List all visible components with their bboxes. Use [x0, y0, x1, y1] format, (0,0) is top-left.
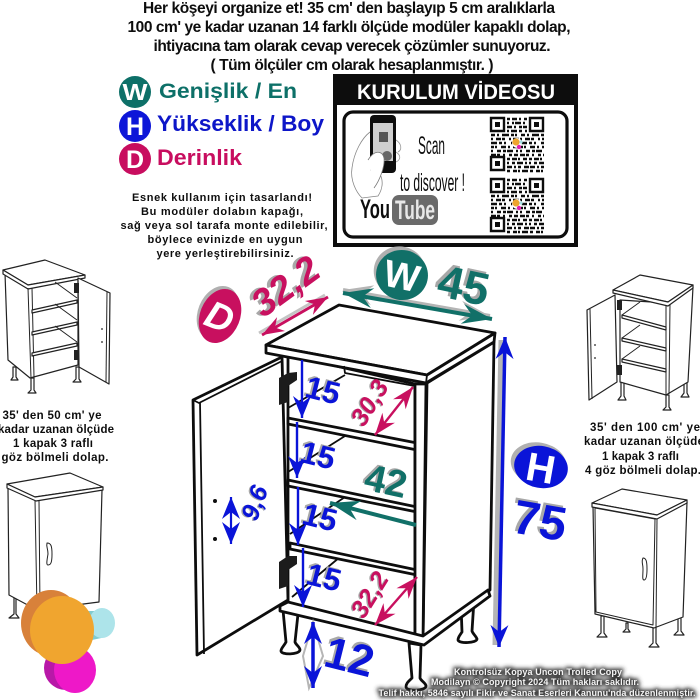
cabinet right side panel — [423, 342, 494, 640]
right cabinet caption: 4 göz bölmeli dolap. — [585, 465, 700, 477]
flexible use description text — [120, 192, 328, 260]
legend item: height: H — [126, 113, 144, 141]
orange cylinder — [21, 590, 94, 664]
legend item: width: Genişlik / En — [159, 80, 297, 103]
copyright notice: Kontrolsüz Kopya Uncon Trolled Copy — [454, 667, 622, 677]
bottom depth: 32,2: 32,2 — [345, 567, 395, 623]
legend: width, height, depth — [119, 76, 325, 175]
right cabinet caption: 1 kapak 3 raflı — [602, 451, 679, 463]
legend item: depth: D — [126, 146, 144, 174]
copyright notice: Modilayn © Copyright 2024 Tüm hakları saklıdır. — [431, 677, 639, 687]
width arrow — [343, 290, 492, 319]
left cabinet caption — [0, 410, 114, 464]
cabinet front posts — [415, 384, 426, 640]
flexible use description text: sağ veya sol tarafa monte edilebilir, — [120, 220, 328, 232]
height badge: H — [523, 445, 559, 493]
light blue cylinder — [88, 608, 115, 640]
intro heading text: 100 cm' ye kadar uzanan 14 farklı ölçüde modüler kapaklı dolap, — [128, 19, 570, 36]
intro heading text — [128, 0, 570, 74]
flexible use description text: yere yerleştirebilirsiniz. — [156, 248, 294, 260]
left cabinet caption: kadar uzanan ölçüde — [0, 424, 114, 436]
shelf labels: 15 — [297, 434, 339, 477]
flexible use description text: böylece evinizde en uygun — [148, 234, 303, 246]
small closed cabinet, right — [592, 489, 687, 647]
flexible use description text: Esnek kullanım için tasarlandı! — [132, 192, 312, 204]
youtube logo: Tube — [395, 195, 435, 225]
shelf labels: 15 — [302, 369, 344, 412]
leg height: 12: 12 — [320, 628, 379, 687]
cabinet top — [266, 305, 495, 386]
shelf labels: 15 — [300, 368, 342, 410]
leg height: 12 — [303, 622, 380, 688]
youtube logo — [360, 194, 438, 225]
door hole spacing: 9,6: 9,6 — [235, 481, 273, 525]
icon: hand holding phone — [352, 115, 401, 198]
panel heading: KURULUM VİDEOSU — [357, 81, 555, 104]
legend item: width: W — [122, 79, 148, 105]
copyright notice: Telif hakkı, 5846 sayılı Fikir ve Sanat Eserleri Kanunu'nda düzenlenmiştir. — [378, 688, 696, 698]
small open cabinet, left — [3, 260, 110, 393]
inner width: 42: 42 — [359, 456, 409, 506]
cabinet door — [193, 357, 288, 655]
depth badge: D — [199, 293, 240, 342]
legend item: height: Yükseklik / Boy — [157, 111, 325, 136]
shelf backs — [288, 375, 345, 597]
inner depth: 30,3: 30,3 — [345, 375, 395, 431]
width value: 45 — [431, 252, 492, 313]
shelves — [288, 418, 417, 575]
qr code bottom — [491, 179, 544, 232]
shelf labels: 15 — [295, 433, 337, 475]
depth arrow — [259, 295, 328, 335]
inner depth: 30,3: 30,3 — [344, 375, 393, 431]
height value: 75 — [506, 488, 568, 550]
height arrow — [495, 337, 505, 647]
height value: 75 — [509, 491, 571, 552]
scan to discover text: Scan — [418, 132, 445, 160]
width dimension: 45 — [343, 242, 495, 319]
left cabinet caption: 35' den 50 cm' ye — [2, 410, 102, 422]
copyright notice: Telif hakkı, 5846 sayılı Fikir ve Sanat Eserleri Kanunu'nda düzenlenmiştir. — [378, 688, 696, 698]
right cabinet caption — [584, 422, 700, 477]
main open cabinet illustration — [193, 305, 495, 690]
installation video panel — [333, 74, 578, 247]
youtube logo: You — [360, 194, 390, 224]
cabinet bottom — [280, 590, 490, 645]
shelf spacing arrows and labels: 15 — [295, 360, 345, 607]
bottom depth: 32,2 — [344, 566, 417, 625]
scan to discover text — [400, 132, 465, 197]
qr code top — [491, 118, 544, 171]
door hinges — [279, 372, 297, 589]
inner depth: 30,3 — [344, 374, 413, 435]
copyright notice: Modilayn © Copyright 2024 Tüm hakları saklıdır. — [431, 677, 639, 687]
left cabinet caption: 1 kapak 3 raflı — [13, 438, 93, 450]
shelf labels — [295, 368, 345, 599]
legend item: height — [119, 110, 325, 142]
door hole spacing: 9,6: 9,6 — [236, 481, 274, 524]
small open cabinet, right — [587, 275, 693, 410]
shelf labels: 15 — [301, 555, 343, 597]
legend item: depth: Derinlik — [157, 145, 243, 170]
cabinet interior — [288, 355, 415, 640]
cabinet legs — [281, 600, 477, 690]
shelf arrows — [297, 360, 303, 607]
inner width: 42 — [330, 456, 416, 525]
intro heading text: ihtiyacına tam olarak cevap verecek çözümler sunuyoruz. — [154, 38, 550, 55]
legend item: width — [119, 76, 297, 108]
shelf labels: 15 — [303, 556, 345, 599]
depth value: 32,2 — [244, 248, 328, 326]
inner width: 42: 42 — [361, 457, 411, 507]
copyright notice: Kontrolsüz Kopya Uncon Trolled Copy — [454, 667, 622, 677]
depth value: 32,2 — [240, 248, 325, 326]
copyright notice — [378, 667, 696, 698]
flexible use description text: Bu modüler dolabın kapağı, — [141, 206, 303, 218]
width value: 45 — [433, 254, 494, 316]
shelf labels: 15 — [297, 495, 339, 537]
depth dimension: 32,2 — [188, 247, 328, 349]
leg height: 12: 12 — [318, 625, 378, 685]
depth badge — [188, 280, 250, 349]
intro heading text: Her köşeyi organize et! 35 cm' den başlayıp 5 cm aralıklarla — [143, 0, 555, 17]
width badge: W — [380, 253, 424, 301]
legend item: depth — [119, 143, 243, 175]
magenta cylinder — [44, 646, 96, 693]
width badge — [368, 242, 433, 305]
height dimension: 75 — [495, 337, 572, 647]
logo: colored cylinders — [21, 590, 115, 693]
intro heading text: ( Tüm ölçüler cm olarak hesaplanmıştır. ) — [210, 57, 494, 74]
small closed cabinet, left — [7, 473, 103, 618]
installation video panel: to discover ! — [400, 169, 465, 197]
shelf labels: 15 — [299, 496, 341, 539]
right cabinet caption: 35' den 100 cm' ye — [590, 422, 700, 434]
height badge — [506, 438, 572, 495]
bottom depth: 32,2: 32,2 — [344, 567, 393, 623]
left cabinet caption: göz bölmeli dolap. — [2, 452, 108, 464]
door hole spacing: 9,6 — [231, 481, 274, 544]
